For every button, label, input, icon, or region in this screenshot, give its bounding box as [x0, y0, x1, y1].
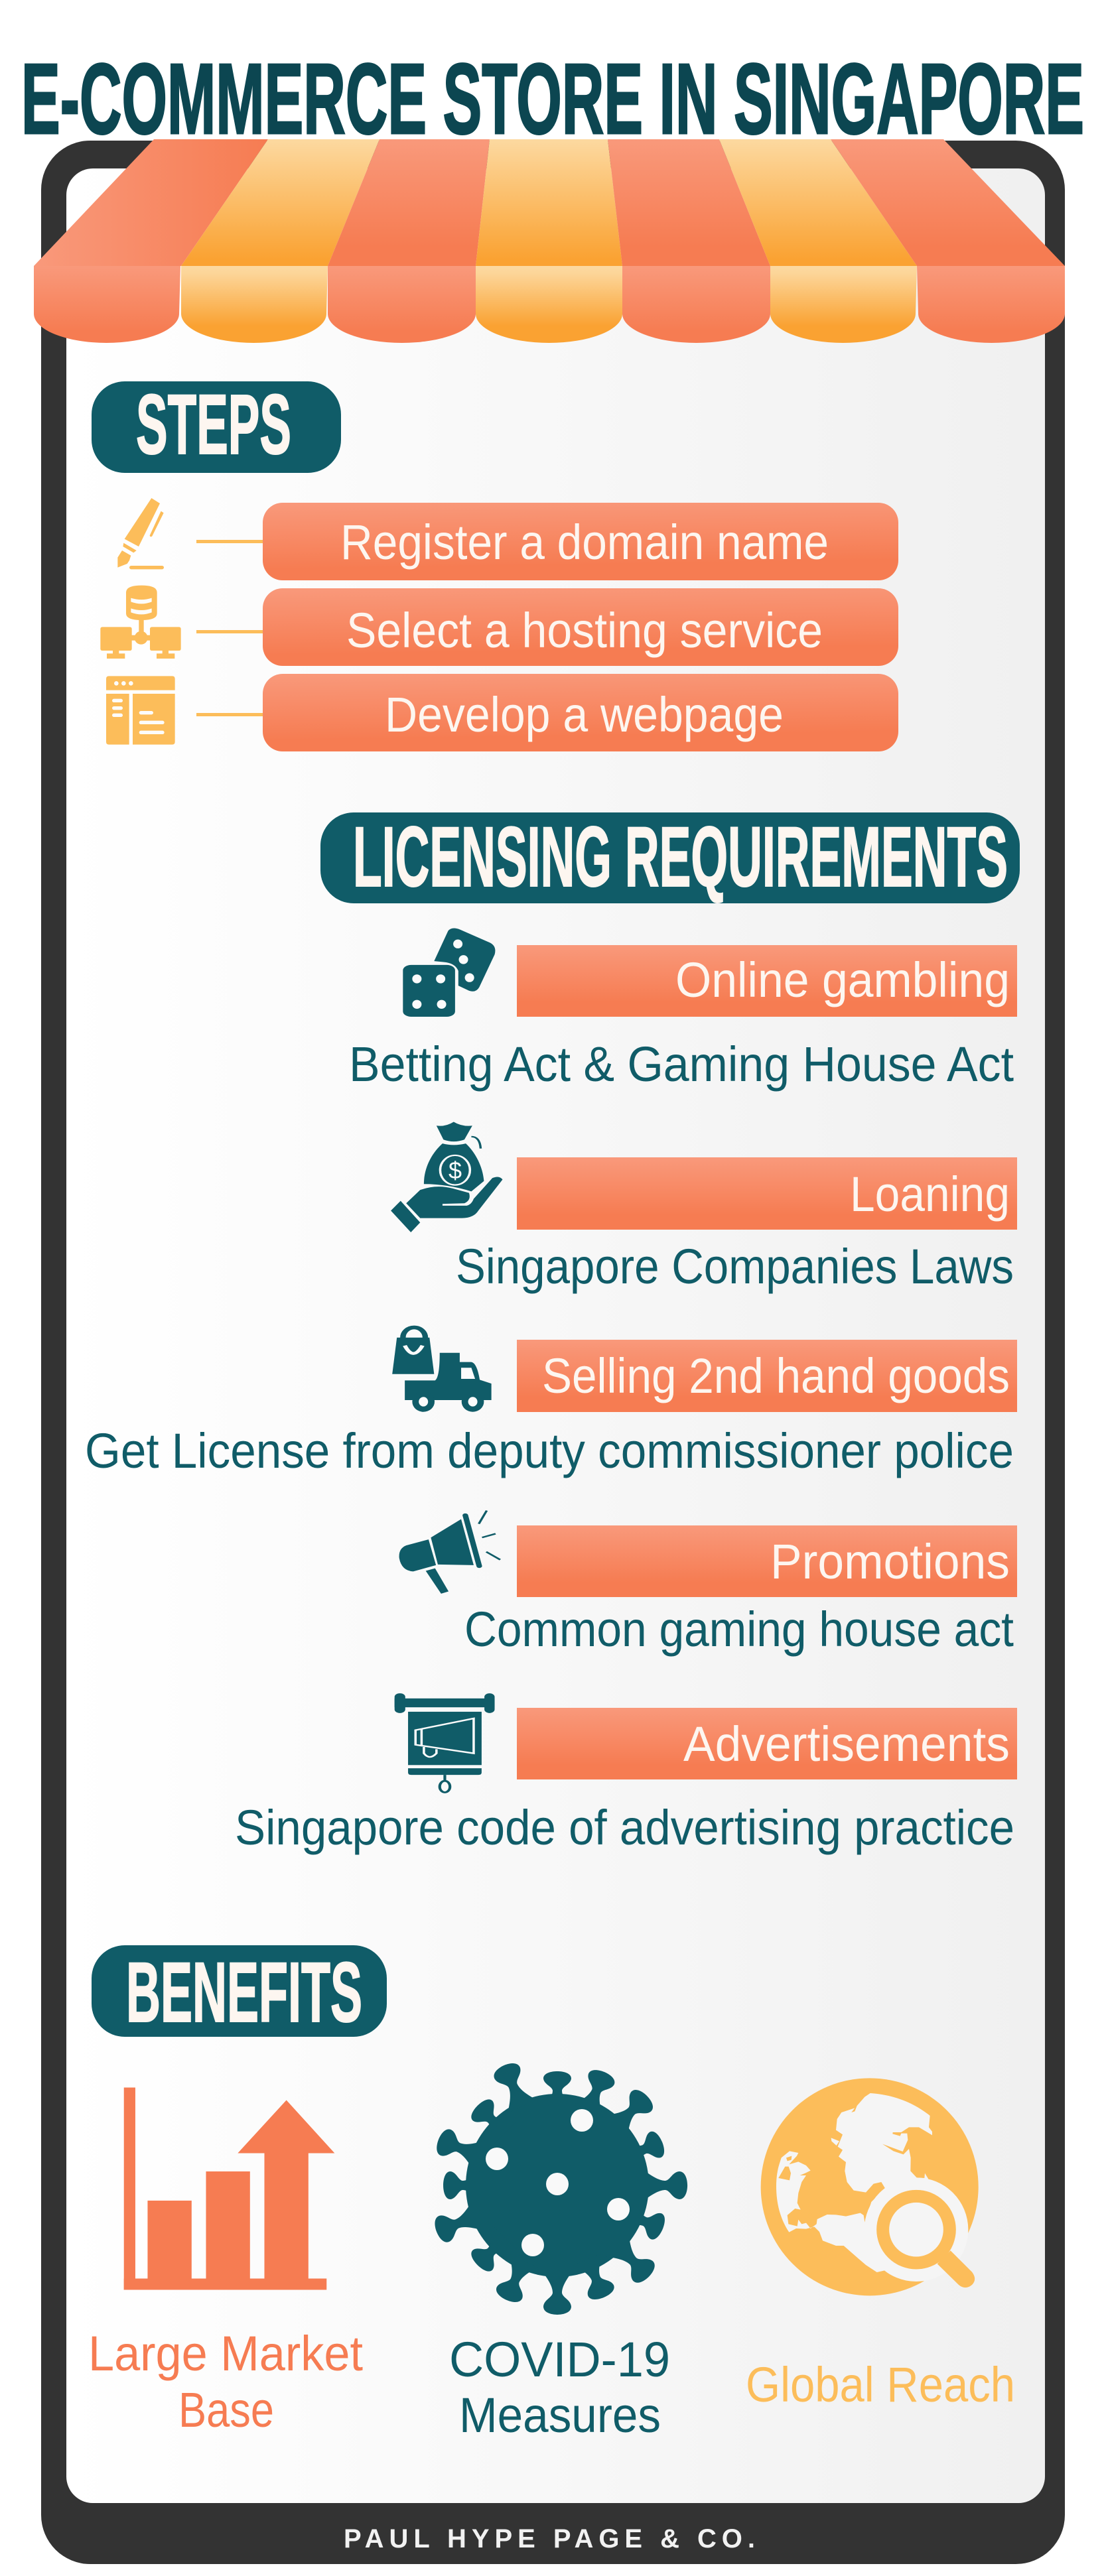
step: select a hosting service	[263, 588, 898, 666]
item: promotions: Promotions	[770, 1534, 1010, 1589]
item: promotions	[517, 1525, 1017, 1597]
heading: steps: STEPS	[136, 377, 291, 472]
label: large market base: Large Market	[88, 2326, 363, 2381]
label: large market base: Base	[178, 2382, 274, 2437]
step: register a domain name: Register a domain name	[340, 515, 829, 570]
text: code of advertising: Singapore code of advertising practice	[235, 1800, 1014, 1855]
text: betting act: Betting Act & Gaming House Act	[349, 1037, 1014, 1092]
item: loaning: Loaning	[850, 1167, 1010, 1222]
panel: steps	[92, 377, 898, 751]
icon: coronavirus	[431, 2059, 687, 2315]
text: companies laws: Singapore Companies Laws	[456, 1239, 1014, 1294]
icon: money bag in hand	[391, 1122, 502, 1232]
label: covid-19 measures: COVID-19	[449, 2332, 670, 2387]
label: large market base	[88, 2326, 363, 2437]
icon: dice	[403, 929, 495, 1017]
connector lines	[196, 540, 264, 716]
icon: server network	[100, 586, 181, 659]
footer credit: PAUL HYPE PAGE & CO.	[344, 2524, 755, 2553]
icon: globe with magnifier	[761, 2078, 979, 2295]
awning	[34, 139, 1065, 343]
heading: benefits: BENEFITS	[126, 1945, 362, 2040]
step: register a domain name	[263, 503, 898, 580]
icon: advertising board	[395, 1693, 495, 1792]
item: online gambling	[517, 945, 1017, 1017]
step: develop a webpage	[263, 674, 898, 751]
step: select a hosting service: Select a hosting service	[346, 603, 823, 658]
item: second hand goods	[517, 1340, 1017, 1412]
text: common gaming house act: Common gaming house act	[464, 1602, 1014, 1657]
panel: benefits	[88, 1945, 1015, 2443]
item: advertisements: Advertisements	[683, 1716, 1010, 1771]
label: global reach: Global Reach	[746, 2357, 1015, 2412]
chart icon: rising bars	[124, 2088, 334, 2289]
step: develop a webpage: Develop a webpage	[385, 687, 784, 742]
panel: licensing requirements	[85, 810, 1020, 1855]
label: covid-19 measures: Measures	[459, 2388, 661, 2443]
heading: steps	[92, 377, 341, 473]
icon: delivery truck with bag	[392, 1327, 492, 1412]
icon: megaphone	[399, 1511, 500, 1594]
icon: pen	[117, 498, 164, 569]
icon: money bag in hand: $	[449, 1157, 462, 1184]
text: license: Get License from deputy commissioner police	[85, 1423, 1014, 1478]
item: online gambling: Online gambling	[675, 952, 1010, 1007]
icon: webpage layout	[106, 676, 175, 745]
item: loaning	[517, 1157, 1017, 1230]
heading: benefits	[92, 1945, 387, 2040]
label: covid-19 measures	[449, 2332, 670, 2443]
item: advertisements	[517, 1708, 1017, 1779]
item: second hand goods: Selling 2nd hand goods	[542, 1348, 1010, 1403]
